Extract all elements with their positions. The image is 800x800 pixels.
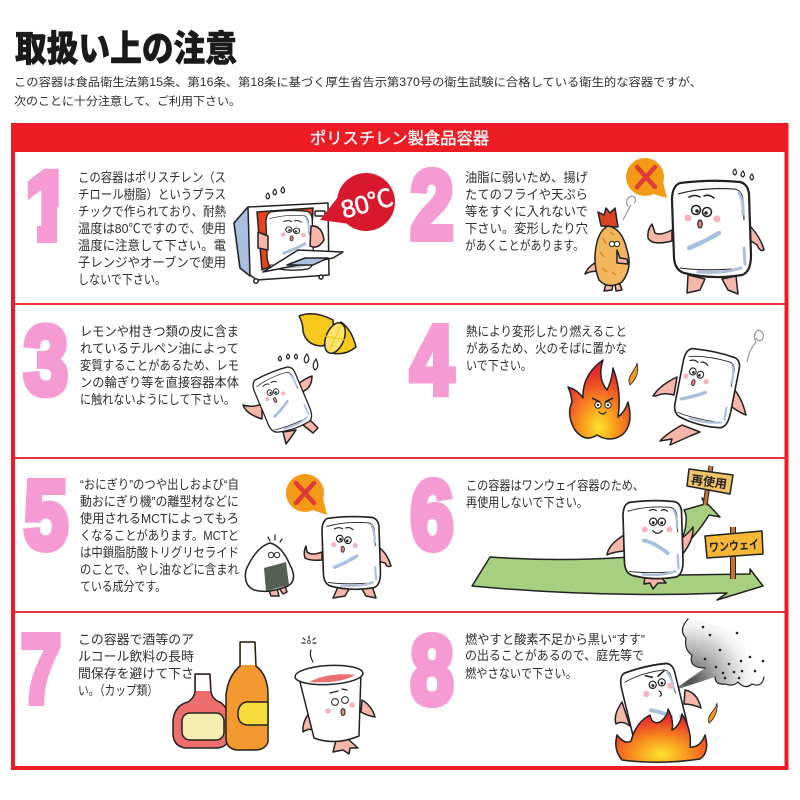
sign: reuse: 再使用 [690,472,728,491]
number 4: 4 [410,305,454,414]
text 2 [465,170,588,253]
text 3: に触れないようにして下さい。 [80,392,235,407]
text 8: の出ることがあるので、庭先等で [465,648,644,663]
illustration: burning container with black smoke [615,619,764,762]
text 2: 油脂に弱いため、揚げ [465,170,588,185]
text 1: 子レンジやオーブンで使用 [78,255,226,270]
panel heading: ポリスチレン製食品容器 [310,129,489,148]
text 7: 間保存を避けて下さ [78,666,194,681]
text 7: この容器で酒等のア [78,632,194,647]
illustration: one-way arrow and signs [472,466,763,600]
number 7: 7 [21,615,61,724]
text 4: 熱により変形したり燃えること [466,324,627,339]
text 6: 再使用しないで下さい。 [466,495,588,510]
text 5: 使用されるMCTによってもろ [80,511,239,526]
number 2: 2 [410,150,454,259]
cup [295,664,363,742]
fire [616,709,707,762]
text 5: 動おにぎり機”の離型材などに [80,494,239,509]
smoke [672,619,764,691]
text 1: 温度に注意して下さい。電 [78,238,226,253]
arrow: one-way [472,557,763,600]
illustration: lemon and container [243,314,356,444]
number 6: 6 [410,460,454,569]
red bottle [173,674,229,748]
text 2: 下さい。変形したり穴 [465,221,588,236]
intro text: この容器は食品衛生法第15条、第16条、第18条に基づく厚生省告示第370号の衛生試験に合格している衛生的な容器ですが、 [14,75,702,89]
text 4: があるため、火のそばに置かな [466,341,627,356]
number 8: 8 [410,615,454,724]
text 7: ルコール飲料の長時 [78,649,194,664]
text 3 [80,324,239,407]
text 1: 温度は80℃ですので、使用 [78,221,226,236]
text 3: ンの輪ぎり等を直接容器本体 [80,375,239,390]
text 2: 等をすぐに入れないで [465,204,588,219]
callout: 80°C [320,173,396,231]
text 8: 燃やさないで下さい。 [465,666,577,681]
text 5: ている成分です。 [80,579,166,594]
text 6: この容器はワンウェイ容器のため、 [466,478,644,493]
text 7 [78,632,194,698]
text 2: たてのフライや天ぷら [465,187,588,202]
text 3: 変質することがあるため、レモ [80,358,239,373]
text 8 [465,632,645,681]
intro text: 次のことに十分注意して、ご利用下さい。 [14,94,241,108]
intro text [14,75,702,108]
text 1: チロール樹脂）というプラス [78,187,226,202]
text 1 [78,170,226,287]
text 5: “おにぎり”のつや出しおよび“自 [80,477,239,492]
text 5 [80,477,239,594]
text 2: があくことがあります。 [465,238,584,253]
text 5: くなることがあります。MCTと [80,528,239,543]
text 3: レモンや柑きつ類の皮に含ま [80,324,239,339]
text 1: チックで作られており、耐熱 [78,204,226,219]
panel: polystyrene food containers [11,123,788,768]
callout: 80°C: 80℃ [338,184,396,224]
sign: one way [705,527,763,579]
orange bottle [226,642,268,750]
text 1: しないで下さい。 [78,272,166,287]
title: 取扱い上の注意 [15,28,237,69]
text 6 [466,478,644,510]
text 3: れているテルペン油によって [80,341,239,356]
number 5: 5 [24,461,68,569]
illustration: container in oven with 80°C bubble [234,173,396,283]
illustration: rice ball and container [245,474,391,598]
text 7: い。（カップ類） [78,683,158,698]
text 4 [466,324,627,373]
number 3: 3 [24,307,68,415]
number 1: 1 [25,153,71,261]
text 8: 燃やすと酸素不足から黒い“すす” [465,632,645,647]
text 5: のことで、やし油などに含まれ [80,562,239,577]
arrow: reuse branch [680,498,720,548]
sign: one way: ワンウェイ [709,537,759,555]
text 5: は中鎖脂肪酸トリグリセライド [80,545,239,560]
text 1: この容器はポリスチレン（ス [78,170,226,185]
text 4: いで下さい。 [466,358,532,373]
sign: reuse [687,466,733,505]
illustration: flame and sweating container [568,330,763,445]
illustration: fried shrimp and container [585,158,764,294]
illustration: bottles and cup [173,636,375,754]
